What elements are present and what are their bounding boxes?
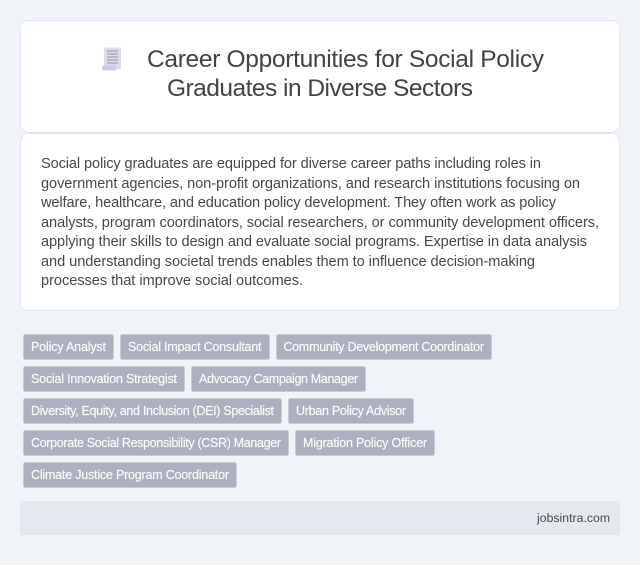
tag: Community Development Coordinator: [276, 334, 492, 360]
title: Graduates in Diverse Sectors: [167, 75, 473, 102]
panel: description: [20, 134, 620, 310]
tag: CSR Manager: [24, 430, 288, 456]
icon: document scroll: [102, 48, 121, 70]
text block: description: [40, 156, 599, 289]
tag: Advocacy Campaign Manager: Advocacy Campaign Manager: [199, 372, 358, 386]
tag: Social Impact Consultant: [120, 334, 270, 360]
tag: Social Innovation Strategist: Social Innovation Strategist: [31, 372, 178, 386]
tag: Climate Justice Program Coordinator: [24, 462, 236, 488]
tag: Social Innovation Strategist: [24, 366, 184, 392]
tag: Urban Policy Advisor: Urban Policy Advisor: [296, 404, 406, 418]
text block: description: processes that improve social outcomes.: [41, 273, 303, 289]
text block: description: and understanding societal trends enables them to influence decision-making: [41, 254, 535, 270]
footer: [20, 501, 620, 535]
tag: Migration Policy Officer: Migration Policy Officer: [303, 436, 427, 450]
tag: Community Development Coordinator: Community Development Coordinator: [284, 340, 484, 354]
text block: description: welfare, healthcare, and education policy development. They often work as policy: [40, 195, 557, 211]
tag: Policy Analyst: Policy Analyst: [31, 340, 107, 354]
tag: CSR Manager: Corporate Social Responsibility (CSR) Manager: [31, 436, 281, 450]
tag: DEI Specialist: [24, 398, 282, 424]
tag: Policy Analyst: [24, 334, 114, 360]
text block: description: applying their skills to design and evaluate social programs. Expertise in data analysis: [41, 234, 587, 250]
tag: Advocacy Campaign Manager: [192, 366, 366, 392]
tag: DEI Specialist: Diversity, Equity, and Inclusion (DEI) Specialist: [31, 404, 275, 418]
tag: Climate Justice Program Coordinator: Climate Justice Program Coordinator: [31, 468, 229, 482]
footer source text: jobsintra.com: [536, 511, 610, 525]
text block: description: government agencies, non-profit organizations, and research institutions focusing on: [41, 176, 580, 192]
tag list: career roles: [24, 334, 492, 488]
text block: description: analysts, program coordinators, social researchers, or community development officers,: [41, 215, 599, 231]
tag: Social Impact Consultant: Social Impact Consultant: [128, 340, 262, 354]
title: [147, 46, 545, 102]
text block: description: Social policy graduates are equipped for diverse career paths including roles in: [41, 156, 541, 172]
title: Career Opportunities for Social Policy: [147, 46, 545, 73]
panel: header: [20, 20, 620, 132]
tag: Urban Policy Advisor: [288, 398, 414, 424]
tag: Migration Policy Officer: [296, 430, 434, 456]
